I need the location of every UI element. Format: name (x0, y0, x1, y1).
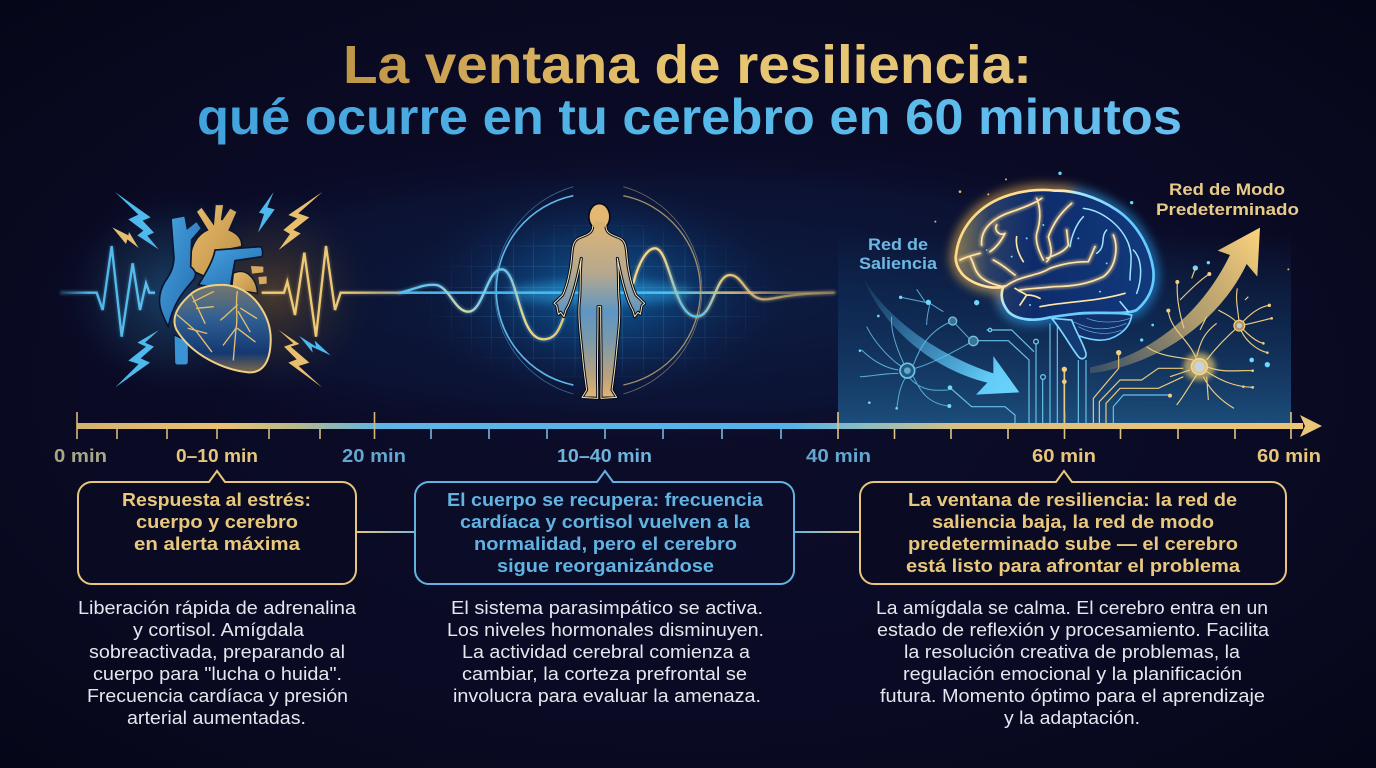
pulmonary artery (198, 247, 263, 289)
gold nodes (1062, 350, 1172, 398)
text block: stress details (78, 598, 357, 728)
cerebrum (956, 190, 1154, 320)
text block: stress details: Liberación rápida de adrenalina (78, 598, 357, 618)
text block: stress details: cuerpo para "lucha o huida". (93, 664, 342, 684)
circuit traces gold (1064, 353, 1183, 423)
callout: stress response: en alerta máxima (134, 533, 301, 554)
illustration: networks and neurons (859, 172, 1289, 423)
connector: first to second callout (356, 531, 415, 533)
label: Red de Saliencia: Red de (868, 235, 928, 254)
label: Red de Modo Predeterminado: Red de Modo (1169, 180, 1285, 199)
aorta arch (190, 204, 242, 277)
circuit nodes (988, 328, 1045, 379)
label: Red de Saliencia (859, 235, 938, 273)
gyri blue (1070, 208, 1141, 312)
callout: stress response: cuerpo y cerebro (136, 511, 298, 532)
gold neurons (1147, 268, 1272, 408)
title: qué ocurre en tu cerebro en 60 minutos (197, 89, 1182, 145)
callout: resilience window: saliencia baja, la red de modo (932, 511, 1214, 532)
text block: stress details: Frecuencia cardíaca y presión (87, 686, 348, 706)
text block: recovery details: El sistema parasimpático se activa. (451, 598, 763, 618)
neuron bodies (1183, 320, 1245, 381)
gyri gold (960, 198, 1125, 307)
right atrium and vena cava (159, 216, 202, 327)
timeline labels: 20 min (342, 445, 406, 466)
circuit traces blue (950, 323, 1170, 423)
brain glow (956, 190, 1154, 320)
callout: body recovers: normalidad, pero el cerebro (474, 533, 737, 554)
timeline labels: 10–40 min (557, 445, 652, 466)
timeline labels: 0 min (54, 445, 107, 466)
wave right (633, 248, 833, 317)
title (197, 35, 1182, 145)
baseline glow (507, 281, 693, 305)
lower vena cava (174, 335, 188, 365)
brain stem (1052, 318, 1086, 359)
text block: stress details: arterial aumentadas. (127, 708, 306, 728)
blue neuron (860, 289, 978, 408)
illustration: human body with calming wave (400, 175, 837, 408)
text block: resilience details: estado de reflexión y procesamiento. Facilita (877, 620, 1270, 640)
label: Red de Saliencia: Saliencia (859, 254, 938, 273)
label: Red de Modo Predeterminado (1156, 180, 1299, 219)
wave left (400, 269, 563, 339)
icon: glowing brain (956, 190, 1154, 359)
cerebellum (1052, 313, 1132, 340)
icon: anatomical heart (159, 204, 271, 372)
brain specks (986, 224, 1108, 306)
arrow: default mode network rising (1090, 228, 1260, 373)
human silhouette (554, 204, 645, 398)
text block: recovery details: La actividad cerebral comienza a (462, 642, 751, 662)
text block: resilience details: futura. Momento óptimo para el aprendizaje (880, 686, 1265, 706)
label: Red de Modo Predeterminado: Predeterminado (1156, 200, 1299, 219)
grid (432, 225, 765, 377)
timeline labels: 40 min (806, 445, 871, 466)
text block: stress details: y cortisol. Amígdala (133, 620, 305, 640)
callout: body recovers: sigue reorganizándose (497, 555, 714, 576)
pulmonary veins (251, 266, 267, 284)
amber sparks (934, 178, 1289, 270)
callout: body recovers (415, 471, 794, 584)
callout: resilience window: La ventana de resiliencia: la red de (908, 489, 1237, 510)
text block: resilience details (876, 598, 1270, 728)
axis arrow head (1300, 415, 1322, 437)
callout: body recovers: El cuerpo se recupera: frecuencia (447, 489, 764, 510)
timeline labels: 0–10 min (176, 445, 258, 466)
gyri glow (960, 198, 1116, 290)
lightning bolts blue (115, 192, 331, 387)
gold tips (1166, 272, 1273, 389)
title: La ventana de resiliencia: (343, 35, 1032, 95)
illustration: heart with ECG and lightning bolts (60, 187, 400, 400)
cerebellum lines (1073, 318, 1130, 333)
ventricle (175, 285, 271, 372)
text block: resilience details: y la adaptación. (1004, 708, 1140, 728)
timeline labels (54, 445, 1321, 466)
text block: resilience details: La amígdala se calma. El cerebro entra en un (876, 598, 1268, 618)
text block: recovery details: involucra para evaluar la amenaza. (453, 686, 761, 706)
callout: resilience window (860, 471, 1286, 584)
text block: recovery details (447, 598, 764, 706)
timeline labels: 60 min (1032, 445, 1096, 466)
blue sparks (859, 172, 1270, 410)
text block: stress details: sobreactivada, preparando al (89, 642, 345, 662)
axis ticks (77, 412, 1291, 439)
callout: resilience window: está listo para afrontar el problema (906, 555, 1241, 576)
connector: second to third callout (794, 531, 860, 533)
ECG line left (blue) (60, 246, 155, 337)
panel: brain illustration background (838, 233, 1291, 426)
left atrium (232, 272, 257, 293)
callout: stress response (78, 471, 356, 584)
ECG line right (gold) (262, 246, 400, 337)
text block: resilience details: regulación emocional y la planificación (903, 664, 1242, 684)
callout: body recovers: cardíaca y cortisol vuelven a la (460, 511, 751, 532)
timeline labels: 60 min (1257, 445, 1321, 466)
concentric rings (495, 187, 702, 394)
callout: stress response: Respuesta al estrés: (122, 489, 311, 510)
text block: resilience details: la resolución creativa de problemas, la (904, 642, 1241, 662)
timeline axis (77, 412, 1322, 439)
coronary vessels (177, 292, 257, 360)
callout: resilience window: predeterminado sube — el cerebro (908, 533, 1238, 554)
arrow: salience network falling (863, 278, 1019, 395)
text block: recovery details: cambiar, la corteza prefrontal se (462, 664, 747, 684)
text block: recovery details: Los niveles hormonales disminuyen. (447, 620, 764, 640)
lightning bolts gold (112, 192, 322, 387)
